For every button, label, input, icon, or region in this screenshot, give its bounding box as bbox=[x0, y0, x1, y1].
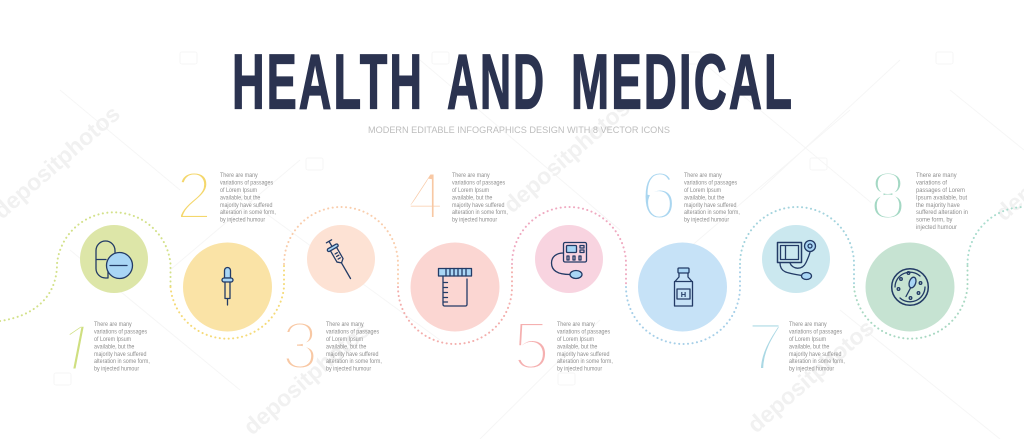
text block 5: of Lorem Ipsum bbox=[557, 336, 594, 343]
text block 2: alteration in some form, bbox=[220, 210, 276, 216]
text block 2: majority have suffered bbox=[220, 202, 272, 209]
text block 5: available, but the bbox=[557, 344, 598, 351]
text block 1: majority have suffered bbox=[94, 351, 146, 358]
text block 6: alteration in some form, bbox=[684, 210, 740, 216]
text block 3: alteration in some form, bbox=[326, 359, 382, 365]
text: depositphotos bbox=[238, 316, 375, 439]
icon: specimen cup bbox=[438, 268, 472, 306]
text block 7: available, but the bbox=[789, 344, 830, 351]
text block 7: alteration in some form, bbox=[789, 359, 845, 365]
text block 5: There are many bbox=[557, 322, 596, 328]
title: HEALTH bbox=[232, 38, 424, 126]
title: AND bbox=[447, 38, 546, 126]
text block 1: There are many bbox=[94, 322, 133, 328]
icon: dropper bbox=[222, 268, 233, 305]
text block 6: by injected humour bbox=[684, 217, 729, 224]
text block 2: There are many bbox=[220, 173, 259, 179]
text block 8 bbox=[916, 172, 968, 231]
text block 7: There are many bbox=[789, 322, 828, 328]
text block 3: of Lorem Ipsum bbox=[326, 336, 363, 343]
text block 7: majority have suffered bbox=[789, 351, 841, 358]
text block 1: alteration in some form, bbox=[94, 359, 150, 365]
text block 5: by injected humour bbox=[557, 366, 602, 373]
number 4: 4 bbox=[407, 159, 444, 234]
step 2 circle bbox=[183, 242, 272, 332]
text block 4: by injected humour bbox=[452, 217, 497, 224]
text block 4: majority have suffered bbox=[452, 202, 504, 209]
number 2: 2 bbox=[176, 159, 212, 234]
icon: pill and capsule bbox=[96, 241, 132, 278]
text block 2 bbox=[220, 173, 276, 224]
text block 1: available, but the bbox=[94, 344, 135, 351]
text block 3: by injected humour bbox=[326, 366, 371, 373]
text block 5 bbox=[557, 322, 613, 373]
text block 2: available, but the bbox=[220, 195, 261, 202]
step 1 circle bbox=[80, 225, 148, 293]
step 3 circle bbox=[307, 225, 375, 293]
text block 4: There are many bbox=[452, 173, 491, 179]
text block 6: available, but the bbox=[684, 195, 725, 202]
text block 8: the majority have bbox=[916, 201, 960, 209]
text block 1 bbox=[94, 322, 150, 373]
text block 7 bbox=[789, 322, 845, 373]
icon: petri dish bbox=[892, 269, 928, 305]
number 7: 7 bbox=[747, 310, 784, 385]
title: MEDICAL bbox=[571, 38, 794, 126]
step 6 circle bbox=[638, 242, 727, 332]
text block 5: alteration in some form, bbox=[557, 359, 613, 365]
text block 3 bbox=[326, 322, 382, 373]
number 5: 5 bbox=[513, 309, 550, 384]
step 7 circle bbox=[762, 225, 830, 293]
text block 1: of Lorem Ipsum bbox=[94, 336, 131, 343]
text block 8: variations of bbox=[916, 179, 947, 187]
text block 3: available, but the bbox=[326, 344, 367, 351]
text block 4 bbox=[452, 173, 508, 224]
number 1: 1 bbox=[51, 308, 103, 391]
text block 6: There are many bbox=[684, 173, 723, 179]
text: depositphotos bbox=[742, 314, 879, 438]
text block 4: available, but the bbox=[452, 195, 493, 202]
text block 7: variations of passages bbox=[789, 329, 842, 336]
icon: sphygmomanometer bbox=[778, 240, 816, 280]
text block 5: variations of passages bbox=[557, 329, 610, 336]
text block 2: by injected humour bbox=[220, 217, 265, 224]
text block 6: of Lorem Ipsum bbox=[684, 187, 721, 194]
text block 2: variations of passages bbox=[220, 180, 273, 187]
number 8: 8 bbox=[870, 159, 906, 234]
text block 5: majority have suffered bbox=[557, 351, 609, 358]
text block 8: passages of Lorem bbox=[916, 187, 965, 194]
text block 6 bbox=[684, 173, 740, 224]
text block 8: some form, by bbox=[916, 216, 953, 224]
text block 7: by injected humour bbox=[789, 366, 834, 373]
title bbox=[232, 38, 794, 126]
text block 8: injected humour bbox=[916, 224, 957, 231]
number 6: 6 bbox=[640, 159, 677, 234]
text block 3: There are many bbox=[326, 322, 365, 328]
text block 1: by injected humour bbox=[94, 366, 139, 373]
text block 2: of Lorem Ipsum bbox=[220, 187, 257, 194]
step 8 circle bbox=[866, 242, 954, 332]
step 5 circle bbox=[535, 225, 603, 293]
text block 3: majority have suffered bbox=[326, 351, 378, 358]
step 4 circle bbox=[410, 242, 500, 332]
text block 8: There are many bbox=[916, 172, 957, 179]
text block 6: majority have suffered bbox=[684, 202, 736, 209]
icon: blood pressure monitor bbox=[552, 242, 586, 278]
icon: syringe bbox=[324, 238, 356, 282]
icon: medicine bottle bbox=[674, 268, 692, 306]
text block 4: of Lorem Ipsum bbox=[452, 187, 489, 194]
text block 8: suffered alteration in bbox=[916, 209, 968, 216]
text block 4: alteration in some form, bbox=[452, 210, 508, 216]
icon: medicine bottle: H bbox=[681, 290, 686, 299]
dotted connector path bbox=[0, 207, 1024, 344]
text block 7: of Lorem Ipsum bbox=[789, 336, 826, 343]
text block 3: variations of passages bbox=[326, 329, 379, 336]
subtitle: MODERN EDITABLE INFOGRAPHICS DESIGN WITH 8 VECTOR ICONS bbox=[368, 125, 670, 136]
text block 8: Ipsum available, but bbox=[916, 194, 967, 201]
text: depositphotos bbox=[498, 94, 635, 218]
text block 4: variations of passages bbox=[452, 180, 505, 187]
text block 6: variations of passages bbox=[684, 180, 737, 187]
number 3: 3 bbox=[282, 309, 318, 384]
text block 1: variations of passages bbox=[94, 329, 147, 336]
